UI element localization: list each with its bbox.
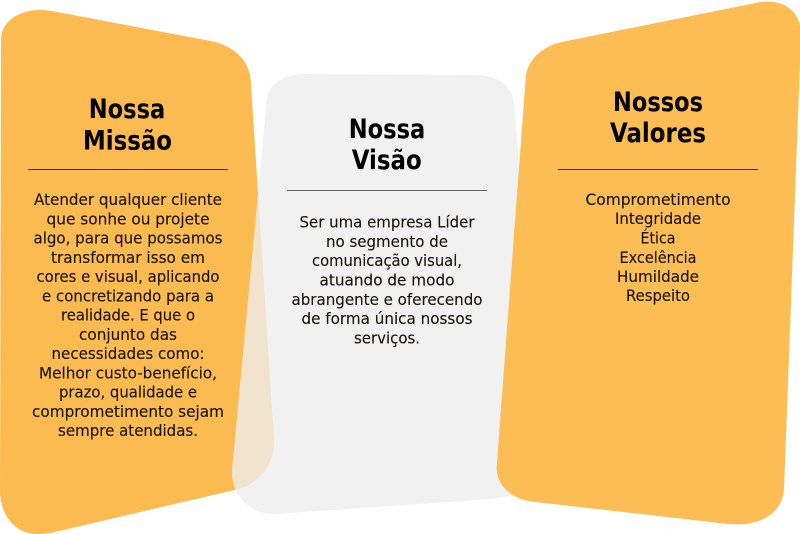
- text block: Nossa Visão: Ser uma empresa Líder: [300, 213, 475, 232]
- text block: Nossa Visão: no segmento de: [326, 232, 448, 251]
- text block: Nossa Missão: necessidades como:: [52, 344, 204, 363]
- text block: Nossa Missão: Atender qualquer cliente: [34, 190, 222, 209]
- text block: Nossa Missão: comprometimento sejam: [32, 402, 224, 421]
- heading: Nossa Visão: Nossa: [349, 114, 425, 145]
- divider: Nossos Valores: [558, 169, 758, 170]
- text block: Nossos Valores: [586, 190, 730, 305]
- text block: Nossa Missão: transformar isso em: [51, 248, 205, 267]
- heading: Nossa Visão: [349, 114, 425, 176]
- heading: Nossos Valores: Nossos: [613, 87, 703, 118]
- text block: Nossa Visão: serviços.: [354, 328, 420, 347]
- text block: Nossa Missão: algo, para que possamos: [34, 229, 222, 248]
- text block: Nossa Visão: [292, 213, 482, 347]
- text block: Nossa Missão: que sonhe ou projete: [46, 209, 210, 228]
- heading: Nossos Valores: Valores: [610, 118, 706, 149]
- text block: Nossa Visão: comunicação visual,: [312, 251, 462, 270]
- panel: Nossa Visão background: [232, 74, 543, 514]
- text block: Nossa Visão: atuando de modo: [320, 270, 454, 290]
- text block: Nossa Missão: [32, 190, 224, 440]
- panel: Nossa Missão background: [0, 10, 274, 534]
- panel: Nossos Valores background: [497, 2, 800, 524]
- text block: Nossa Missão: sempre atendidas.: [58, 421, 198, 440]
- heading: Nossos Valores: [610, 87, 706, 149]
- text block: Nossa Missão: realidade. E que o: [61, 306, 195, 325]
- heading: Nossa Missão: Missão: [83, 125, 172, 156]
- divider: Nossa Missão: [28, 169, 228, 170]
- text block: Nossa Missão: Melhor custo-benefício,: [39, 363, 217, 382]
- heading: Nossa Missão: Nossa: [89, 94, 165, 125]
- heading: Nossa Visão: Visão: [352, 145, 422, 176]
- text block: Nossos Valores: Integridade: [615, 209, 701, 228]
- text block: Nossa Missão: conjunto das: [79, 325, 177, 344]
- text block: Nossa Missão: e concretizando para a: [42, 286, 214, 305]
- text block: Nossos Valores: Comprometimento: [586, 190, 730, 209]
- text block: Nossos Valores: Respeito: [626, 286, 690, 305]
- text block: Nossa Missão: prazo, qualidade e: [59, 383, 197, 402]
- text block: Nossos Valores: Humildade: [617, 267, 699, 286]
- text block: Nossa Visão: de forma única nossos: [302, 309, 472, 328]
- text block: Nossa Missão: cores e visual, aplicando: [36, 267, 220, 286]
- text block: Nossa Visão: abrangente e oferecendo: [292, 290, 482, 309]
- text block: Nossos Valores: Ética: [640, 228, 676, 248]
- heading: Nossa Missão: [83, 94, 172, 156]
- divider: Nossa Visão: [287, 190, 487, 191]
- text block: Nossos Valores: Excelência: [620, 248, 696, 267]
